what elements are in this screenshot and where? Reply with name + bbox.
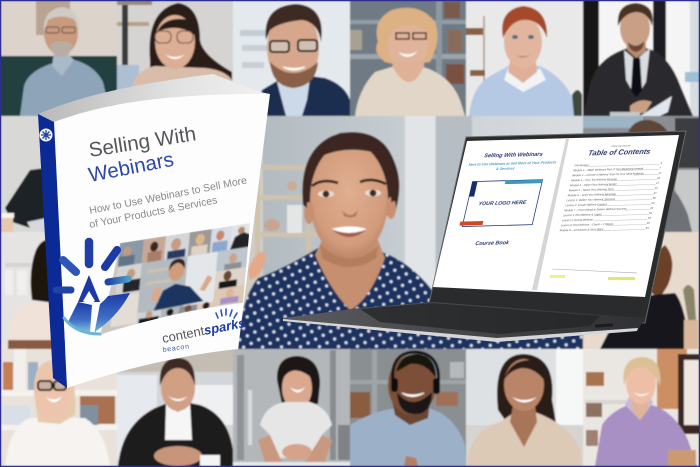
book spine [38,114,67,388]
contents list: 37 [653,191,658,195]
photo: man in black suit with clasped hands [117,349,233,466]
cover spark and pencil logo [56,242,130,335]
book front cover [54,94,270,388]
contents list: 63 [645,226,650,230]
left page: course book cover: & Services [496,167,515,171]
photo: blonde woman with glasses in white blouse [1,349,117,466]
contents list [559,161,665,232]
course book label: Course Book [475,240,510,247]
photo: man with glasses in navy suit [233,1,350,116]
contents list: Introduction [574,163,590,167]
contents list: 49 [650,206,654,210]
photo: woman with dark hair in white shirt, left [1,232,61,350]
contents list: 7 [659,166,662,170]
cover collage photo [100,223,252,339]
photo: smiling woman with glasses [117,1,233,116]
book cover mockup [38,74,270,388]
right page: table of contents: Selling With Webinars [611,144,631,148]
ebook title: Selling With Webinars [483,152,543,159]
brand logo: contentsparks beacon [161,309,247,354]
contents heading: Table of Contents [587,147,652,157]
photo: red-haired woman in blue shirt [466,1,583,116]
contents list: Lesson 2: Create Webinar Content [565,202,607,207]
contents list: Module 1 – Make Webinars Part of Your Marketing Arsenal [573,166,644,172]
contents list: 60 [646,221,651,225]
spine logo [40,128,52,142]
photo: curly-haired woman in black top, right [583,232,699,350]
laptop [283,131,686,342]
ebook subtitle: How to Use Webinars to Sell More of Your Products [468,160,557,167]
photo: man with headset in patterned shirt [350,349,466,466]
photo: older blonde woman in cream top [350,1,466,116]
contents list: 54 [648,216,652,220]
contents list: 27 [656,181,660,185]
book title: Selling With [87,122,198,162]
laptop deck and keyboard [283,302,645,342]
brand logo: contentsparks beacon: contentsparks [161,315,247,346]
contents list: 17 [658,171,662,175]
book title [87,122,198,187]
contents list: 38 [652,196,657,200]
contents list: 3 [660,161,663,165]
contents list: Module 8 – Conclusion & Next Steps [559,227,605,232]
contents list: 42 [651,201,655,205]
photo: blonde woman in lilac shirt [583,349,699,466]
main photo: smiling woman in polka-dot shirt [233,116,583,349]
right page: table of contents [559,143,669,232]
page footer highlights [550,269,637,280]
book subtitle: How to Use Webinars to Sell More [88,175,248,217]
contents list: 31 [654,186,659,190]
contents list: Module 4 – Select Your Webinar Model [570,182,617,187]
book page edges [38,74,270,122]
ebook page fold [532,139,569,290]
laptop screen [433,135,679,297]
photo: blurred arm and coffee cup, left [1,116,61,233]
contents list: Lesson 2: During Webinar [562,217,594,222]
contents list: Lesson 1: Define Your Webinar Structure [566,197,616,202]
contents list: Module 3 – Your Top Webinar Formats [571,177,618,182]
photo: older man in blue shirt on teal sofa [1,1,117,116]
logo placeholder box: YOUR LOGO HERE [478,200,527,207]
left page: course book cover [450,151,559,248]
photo: smiling woman in beige blouse [466,349,583,466]
brand logo: contentsparks beacon: beacon [162,343,190,354]
photo: man in dark suit with notebook [583,1,699,116]
contents list: Lesson 1: Pre-Webinar & Logins [563,212,603,217]
contents list: Module 7 – From Ahead to Deliver Webinar Success [564,207,628,212]
contents list: 24 [657,176,661,180]
contents list: Module 5 – Select Your Webinar Tech [568,187,615,192]
book subtitle: of Your Products & Services [88,194,218,231]
contents list: Module 6 – Craft Your Webinar Message [567,192,617,197]
book title: Webinars [87,148,176,187]
contents list: Lesson 3: Post Webinar – Check + 2 Weeks [560,222,614,227]
laptop lid bezel [428,131,686,323]
photo: woman in floral blouse at table [233,349,350,466]
photo: woman in grey sweater, right [583,116,699,232]
contents list: Module 2 – Choose a Webinar Topic for Your Ideal Audience [572,171,645,177]
contents list: 51 [649,211,653,215]
